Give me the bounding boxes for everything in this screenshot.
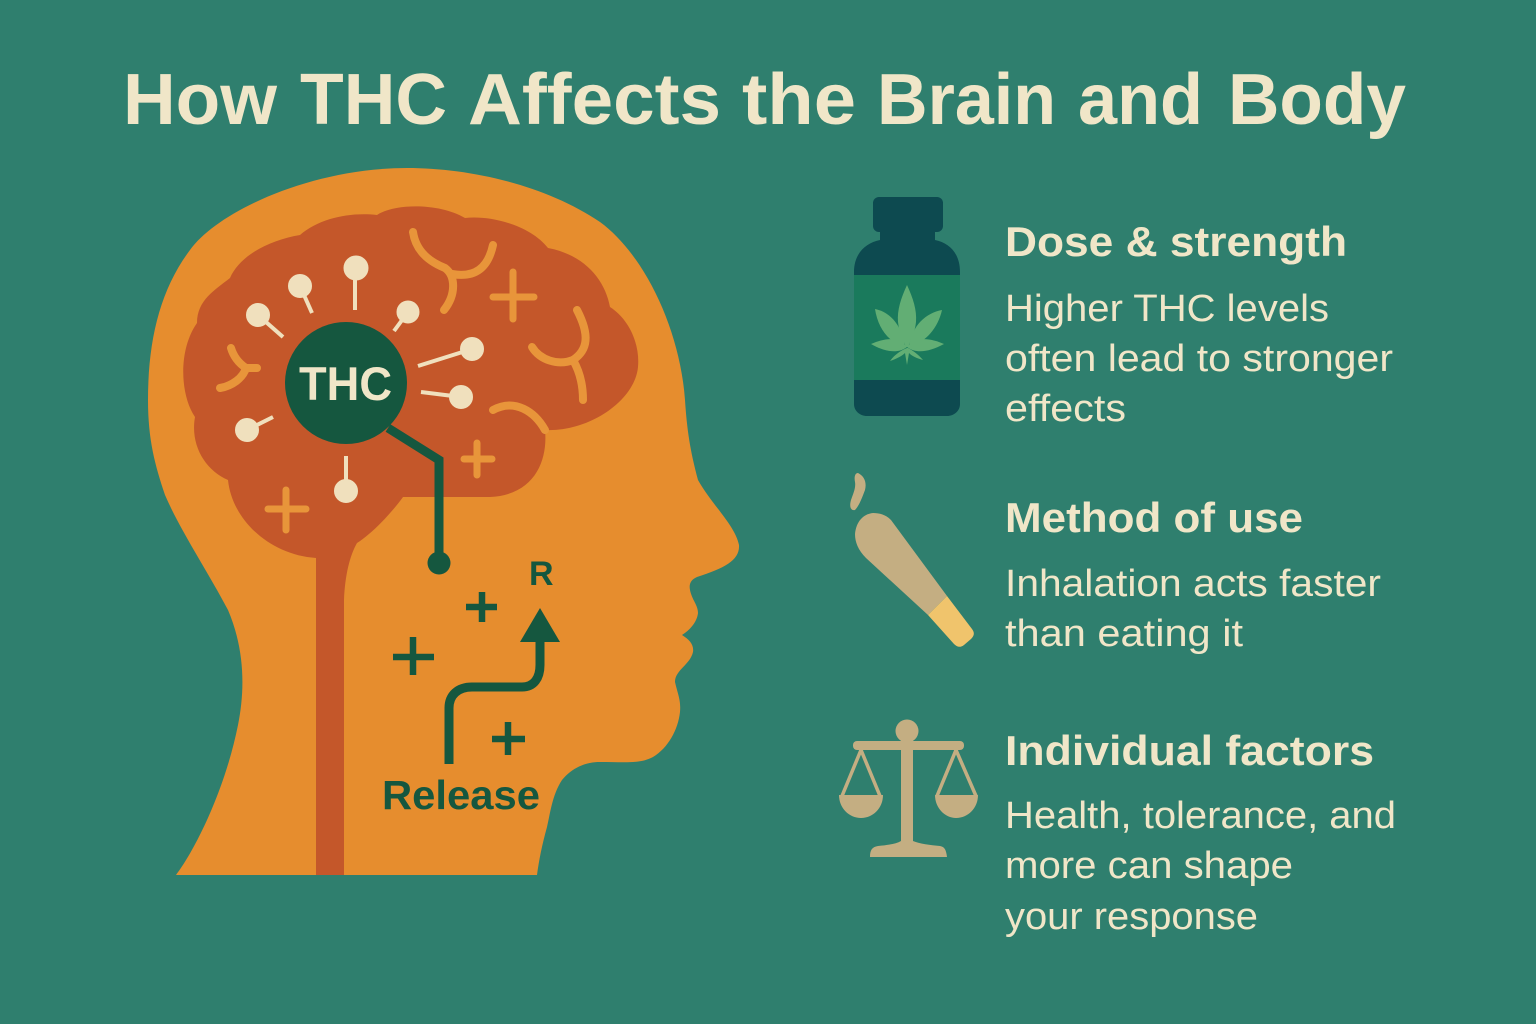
- text: method: [1005, 563, 1381, 655]
- release arrow: [449, 608, 560, 764]
- label Release: Release: [382, 772, 540, 818]
- text: dose: often lead to stronger: [1005, 338, 1393, 380]
- title: Brain: [877, 60, 1056, 140]
- head silhouette: [148, 168, 739, 875]
- title: and: [1078, 60, 1203, 140]
- release plus signs: [393, 592, 525, 755]
- text: individual: your response: [1005, 896, 1258, 938]
- THC circle: [285, 322, 407, 444]
- text: individual: [1005, 795, 1396, 938]
- icon: scales: [839, 720, 978, 857]
- text: individual: Health, tolerance, and: [1005, 795, 1396, 837]
- text: individual: more can shape: [1005, 845, 1293, 887]
- icon: bottle: [854, 197, 960, 416]
- text: dose: [1005, 288, 1393, 430]
- title: [123, 60, 1406, 140]
- connector line to release point: [388, 428, 450, 574]
- text: method: than eating it: [1005, 613, 1243, 655]
- title: How: [123, 60, 278, 140]
- brain fold marks: [220, 232, 586, 430]
- heading: individual: Individual factors: [1005, 727, 1374, 774]
- brain: [183, 206, 638, 875]
- icon: joint: [850, 473, 974, 647]
- title: the: [742, 60, 856, 140]
- title: Affects: [468, 60, 721, 140]
- title: THC: [300, 60, 447, 140]
- heading: method: Method of use: [1005, 494, 1303, 541]
- icon: cannabis leaf: [871, 285, 944, 365]
- text: dose: Higher THC levels: [1005, 288, 1329, 330]
- heading: dose: Dose & strength: [1005, 218, 1347, 265]
- receptor pins: [237, 258, 482, 501]
- head illustration: [148, 168, 739, 875]
- text: method: Inhalation acts faster: [1005, 563, 1381, 605]
- text: dose: effects: [1005, 388, 1126, 430]
- title: Body: [1228, 60, 1406, 140]
- brain plus signs: [268, 272, 534, 530]
- label R: R: [529, 555, 554, 593]
- THC circle: THC: [299, 357, 392, 410]
